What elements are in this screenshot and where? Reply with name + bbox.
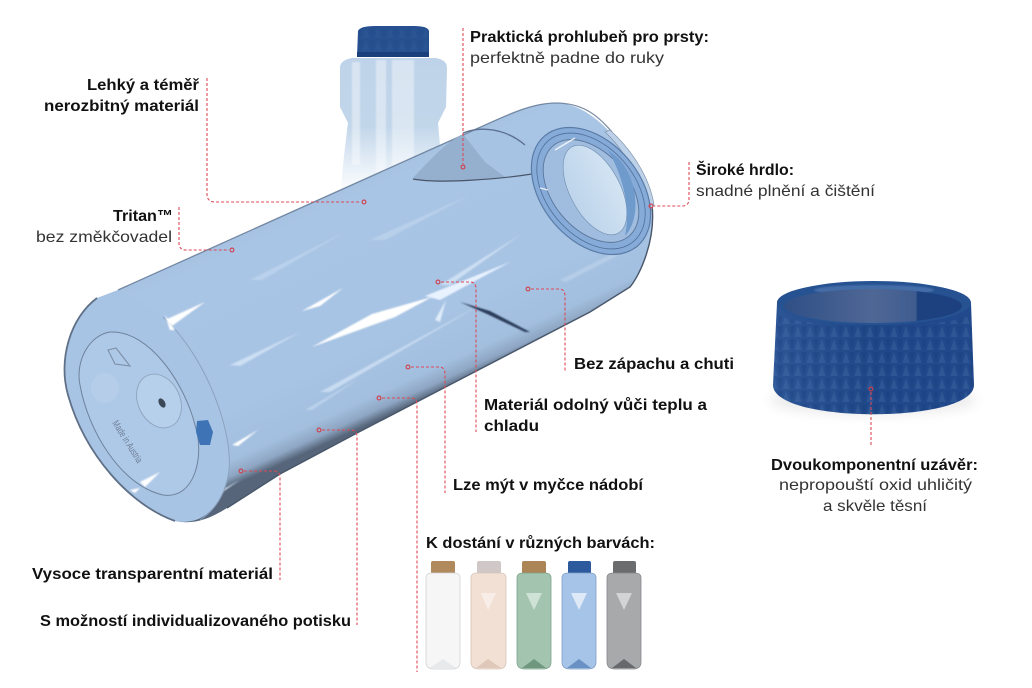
colour variants row xyxy=(426,561,641,669)
variant: green xyxy=(517,561,551,669)
blue grip detail xyxy=(196,420,213,445)
leader: light and unbreakable xyxy=(207,78,366,204)
label: finger recess xyxy=(470,29,709,67)
flange xyxy=(605,130,654,215)
leader lines xyxy=(179,28,873,672)
label: colours: K dostání v různých barvách: xyxy=(426,535,655,552)
highlights on the body xyxy=(166,202,618,492)
label: light material: Lehký a téměř xyxy=(87,77,200,94)
leader: dishwasher xyxy=(406,365,445,493)
label: wide neck: snadné plnění a čištění xyxy=(696,183,876,200)
label: closure xyxy=(771,457,978,515)
base inner recess xyxy=(79,332,199,495)
main bottle, lying xyxy=(65,103,675,522)
cap shadow xyxy=(769,385,977,415)
leader: transparent xyxy=(239,469,280,580)
closure (cap) xyxy=(769,281,977,415)
cap rim xyxy=(777,281,971,325)
label: custom print: S možností individualizovaného potisku xyxy=(40,613,351,630)
leader: colours xyxy=(377,396,417,672)
label: Tritan: bez změkčovadel xyxy=(36,229,172,246)
label: transparent: Vysoce transparentní materiál xyxy=(32,566,273,583)
label: closure: a skvěle těsní xyxy=(823,498,928,515)
wide neck ring xyxy=(507,104,675,278)
background bottle standing behind xyxy=(340,26,447,195)
label: closure: Dvoukomponentní uzávěr: xyxy=(771,457,978,474)
leader: heat and cold xyxy=(436,280,476,432)
label: Tritan: Tritan™ xyxy=(113,208,173,225)
bottle base xyxy=(65,295,229,522)
label: no odour: Bez zápachu a chuti xyxy=(574,356,734,373)
base embossed text: Made in Austria xyxy=(109,419,144,466)
label: heat and cold: Materiál odolný vůči teplu a xyxy=(484,397,707,414)
label: wide neck xyxy=(696,160,876,200)
label: dishwasher: Lze mýt v myčce nádobí xyxy=(453,477,644,494)
leader: no odour xyxy=(526,287,565,371)
cap inner xyxy=(784,289,962,323)
leader: closure xyxy=(869,387,873,447)
label: Tritan xyxy=(36,208,173,246)
base recycling mark xyxy=(108,348,130,366)
back bottle body xyxy=(340,58,447,195)
leader: custom print xyxy=(317,428,357,625)
label: light material: nerozbitný materiál xyxy=(44,98,199,115)
variant: clear xyxy=(426,561,460,669)
label: finger recess: Praktická prohlubeň pro prsty: xyxy=(470,29,709,46)
finger groove, lower slit xyxy=(460,302,530,332)
base highlights xyxy=(130,315,175,493)
finger groove, upper xyxy=(413,130,537,181)
variant: grey xyxy=(607,561,641,669)
ring outer xyxy=(507,104,675,278)
ring inner wall xyxy=(524,121,658,261)
variant: peach xyxy=(471,561,506,669)
label: closure: nepropouští oxid uhličitý xyxy=(779,477,972,494)
leader: finger recess xyxy=(461,28,465,169)
label: heat and cold xyxy=(484,397,707,435)
neck opening xyxy=(550,135,640,245)
dark silhouette edges xyxy=(118,103,612,290)
label: wide neck: Široké hrdlo: xyxy=(696,160,794,179)
back bottle cap xyxy=(357,26,429,57)
bottle silhouette xyxy=(65,103,653,522)
label: heat and cold: chladu xyxy=(484,418,539,435)
leader: wide neck xyxy=(649,162,689,208)
label: finger recess: perfektně padne do ruky xyxy=(470,50,664,67)
cap diamond texture xyxy=(773,315,974,414)
label: light material xyxy=(44,77,200,115)
base centre dimple xyxy=(128,367,190,435)
variant: blue xyxy=(562,561,596,669)
cap outer side xyxy=(773,282,974,414)
leader: Tritan xyxy=(179,207,234,252)
